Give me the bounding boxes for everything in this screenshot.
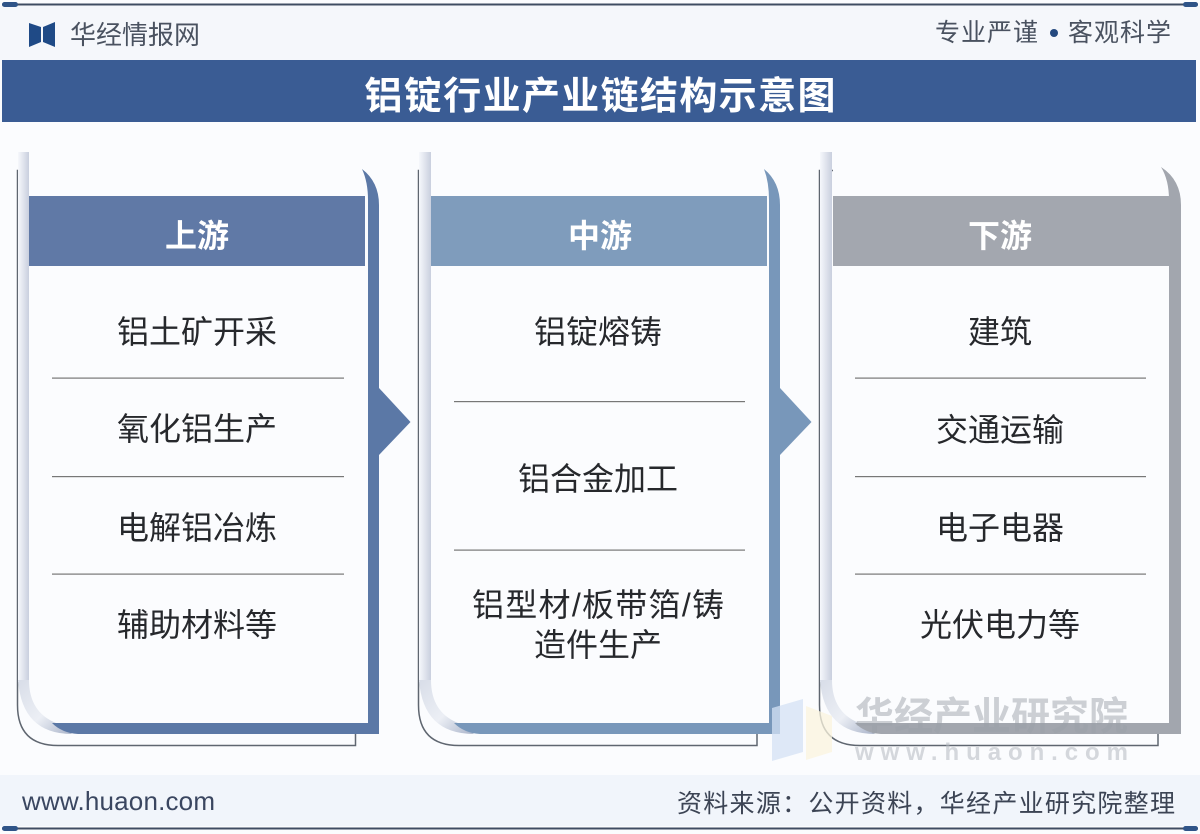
top rule — [2, 2, 1198, 7]
title bar — [2, 60, 1196, 122]
item: 铝土矿开采 — [117, 314, 277, 350]
website: www.huaon.com — [21, 786, 215, 816]
heading: upstream: 上游 — [165, 218, 229, 254]
watermark: 华经产业研究院 — [855, 696, 1128, 739]
item continuation: 造件生产 — [534, 627, 662, 663]
slogan — [935, 19, 1171, 47]
arrow: upstream to midstream — [379, 388, 410, 455]
arrow: midstream to downstream — [780, 388, 812, 455]
icon: Huajing logo — [29, 22, 55, 47]
panel: midstream — [418, 152, 780, 746]
watermark: www.huaon.com — [854, 739, 1128, 766]
item: 电子电器 — [936, 510, 1064, 546]
item: 氧化铝生产 — [117, 411, 277, 447]
watermark — [772, 696, 1128, 766]
slogan: 专业严谨 — [935, 19, 1038, 47]
item: 铝型材/板带箔/铸 — [472, 587, 724, 623]
item: 建筑 — [968, 314, 1032, 350]
footer band — [0, 775, 1200, 826]
panel: downstream — [820, 152, 1181, 746]
item: 交通运输 — [936, 412, 1064, 448]
heading: downstream: 下游 — [968, 218, 1032, 254]
panel: upstream — [18, 152, 379, 746]
title: 铝锭行业产业链结构示意图 — [364, 76, 836, 118]
slogan: 客观科学 — [1068, 19, 1171, 47]
item: 电解铝冶炼 — [117, 510, 277, 546]
brand name: 华经情报网 — [70, 20, 200, 50]
heading: midstream: 中游 — [568, 218, 632, 254]
source note: 资料来源：公开资料，华经产业研究院整理 — [677, 790, 1175, 818]
item: 铝合金加工 — [518, 461, 678, 497]
item: 光伏电力等 — [920, 607, 1080, 643]
item: 铝锭熔铸 — [534, 314, 662, 350]
bottom rule — [2, 826, 1198, 831]
item: 辅助材料等 — [117, 607, 277, 643]
